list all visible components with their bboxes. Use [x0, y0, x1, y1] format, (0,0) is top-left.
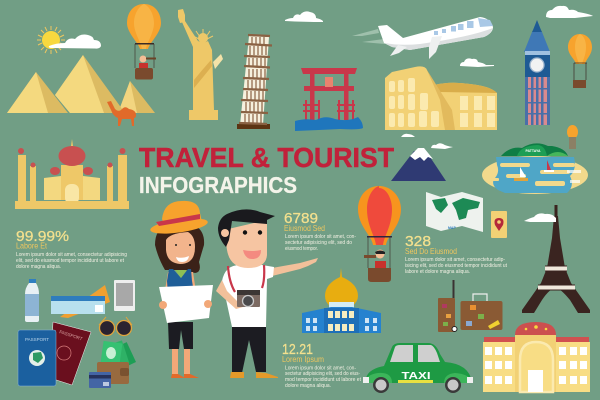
- text block: 12.21: mod tempor incididunt ut labore et: [285, 377, 362, 383]
- icon: small suitcase: [438, 280, 457, 332]
- icon: large red and orange balloon: [358, 186, 401, 282]
- text block: 99.99%: elit, sed do eiusmod tempor incididunt ut labore et: [16, 258, 125, 264]
- icon: wallet: [97, 362, 129, 384]
- icon: big ben: [524, 20, 550, 125]
- title: TRAVEL & TOURIST: [139, 142, 394, 173]
- text block: 328: labore et dolore magna aliqua.: [405, 269, 470, 275]
- icon: cloud top right: [546, 6, 593, 18]
- icon: leaning tower of pisa: [237, 35, 272, 129]
- text block: 328: isicing elit, sed do eiusmod tempor incididunt ut: [405, 263, 508, 269]
- icon: phone with pin: [491, 211, 507, 238]
- text block: 99.99%: dolore magna aliqua.: [16, 264, 61, 270]
- icon: camel: [107, 101, 136, 126]
- icon: blue boarding pass: [51, 296, 105, 314]
- text block: 328: [405, 234, 508, 275]
- illustration: woman tourist: [149, 201, 213, 378]
- text block: 6789: Lorem ipsum dolor sit amet, con-: [285, 234, 356, 240]
- text block: 99.99%: 99.99%: [16, 229, 69, 245]
- icon: red torii gate: [301, 68, 357, 120]
- icon: statue of liberty: [178, 9, 223, 120]
- icon: cash: [101, 340, 136, 368]
- icon: large suitcase: [460, 294, 502, 330]
- text block: 328: 328: [405, 234, 431, 250]
- text block: 12.21: Lorem ipsum dolor sit amet, con-: [285, 366, 356, 372]
- text block: 12.21: sectetur adipisicing elit, sed do eius-: [285, 371, 360, 377]
- text block: 99.99%: Lorem ipsum dolor sit amet, consectetur adipisicing: [16, 252, 127, 258]
- text block: 12.21: dolore magna aliqua.: [285, 383, 331, 389]
- icon: water bottle: [25, 279, 39, 322]
- text block: 6789: 6789: [284, 211, 318, 227]
- text block: 328: Sed Do Eiusmod: [405, 246, 457, 256]
- text block: 12.21: Lorem Ipsum: [282, 354, 324, 364]
- icon: world map: MAP: [448, 226, 456, 230]
- text block: 6789: eiusmod tempor.: [285, 246, 318, 252]
- icon: taj mahal: [15, 139, 129, 209]
- icon: cloud beside sun: [49, 34, 101, 49]
- text block: 6789: [284, 211, 356, 252]
- icon: mount fuji: [391, 148, 446, 181]
- icon: airplane: [352, 17, 493, 59]
- icon: world map: [426, 192, 483, 232]
- icon: tablet: [114, 280, 135, 311]
- icon: credit card: [89, 372, 111, 388]
- text block: 6789: sectetur adipisicing elit, sed do: [285, 240, 352, 246]
- icon: green taxi: TAXI: [402, 371, 431, 382]
- title: [139, 142, 394, 198]
- icon: red passport: PASSPORT: [59, 329, 83, 341]
- icon: sun: [37, 26, 65, 54]
- icon: small cloud top centre: [285, 11, 323, 22]
- icon: blue passport: PASSPORT: [25, 337, 49, 342]
- text block: 328: Lorem ipsum dolor sit amet, consectetur adip-: [405, 257, 505, 263]
- icon: red passport: [50, 322, 91, 385]
- icon: blue water under torii: [295, 117, 363, 131]
- icon: hotel: [483, 322, 590, 392]
- icon: orange ticket: [60, 285, 110, 318]
- icon: small clouds: [401, 134, 453, 149]
- icon: pattaya island: PATTAYA: [525, 149, 541, 153]
- subtitle: INFOGRAPHICS: [139, 172, 297, 198]
- text block: 12.21: [282, 342, 362, 389]
- icon: colosseum: [385, 66, 497, 130]
- text block: 12.21: 12.21: [282, 342, 313, 358]
- text block: 99.99%: [16, 229, 127, 270]
- icon: cloud at eiffel tower: [524, 213, 556, 222]
- illustration: man tourist: [216, 209, 318, 378]
- icon: right hot air balloon: [568, 34, 592, 88]
- icon: orange hot air balloon: [127, 4, 161, 80]
- icon: green taxi: [363, 343, 473, 393]
- icon: pattaya island: [482, 143, 588, 194]
- icon: mosque: [302, 268, 381, 333]
- icon: pyramids: [7, 55, 155, 113]
- icon: eiffel tower: [522, 205, 590, 313]
- icon: small balloon: [567, 125, 578, 149]
- icon: blue passport: [18, 330, 56, 386]
- text block: 6789: Eiusmod Sed: [284, 223, 325, 233]
- icon: sunglasses: [99, 317, 132, 336]
- text block: 99.99%: Labore Et: [16, 240, 48, 250]
- icon: cloud near plane: [460, 58, 494, 67]
